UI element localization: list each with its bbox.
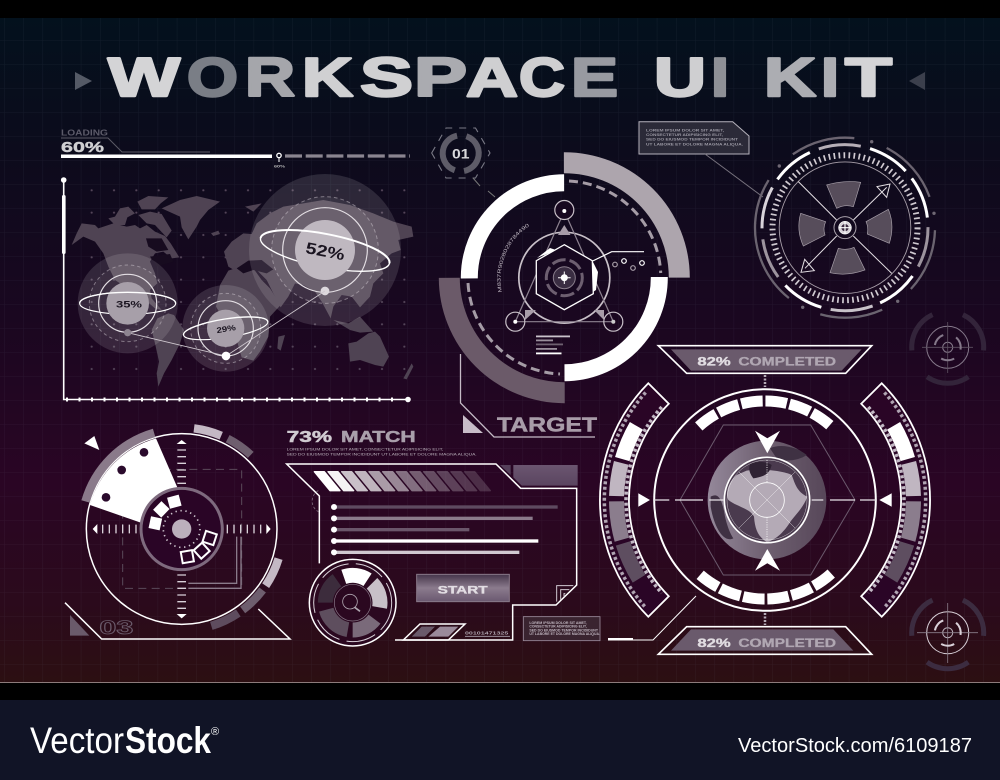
title: I	[711, 46, 729, 108]
chart axes	[61, 177, 411, 402]
code readout	[465, 630, 510, 636]
banner: bottom completed	[658, 627, 872, 654]
title: W	[108, 46, 180, 108]
striped progress bar	[314, 472, 490, 491]
crosshair line	[653, 499, 877, 501]
world map with percentage planets	[72, 174, 413, 387]
globe dial	[560, 295, 970, 705]
footer logo: Vector	[30, 720, 124, 761]
icon: reticle lower	[898, 583, 998, 683]
START button: START	[438, 584, 488, 596]
centre crosshair	[546, 260, 582, 296]
icon: right title arrow	[909, 72, 925, 90]
START button	[417, 574, 509, 602]
planet: 52%	[249, 174, 401, 326]
block arcs	[625, 360, 905, 640]
banner: bottom completed: COMPLETED	[738, 636, 836, 650]
match panel	[287, 429, 600, 646]
banner: top completed: COMPLETED	[738, 354, 836, 368]
footer logo: Stock	[125, 720, 211, 761]
text callout top right	[639, 122, 763, 197]
icon: faint reticle upper	[898, 297, 998, 397]
white sector	[90, 438, 177, 523]
pointer and small circles	[593, 252, 644, 270]
outer arcs	[40, 387, 324, 671]
dark seas over land	[146, 238, 273, 273]
right gauge	[560, 295, 970, 705]
73% match heading	[287, 429, 477, 457]
search dial	[309, 559, 396, 646]
bottom text box: CONSECTETUR ADIPISICING ELIT,	[529, 625, 587, 629]
73% match heading: LOREM IPSUM DOLOR SIT AMET, CONSECTETUR ADIPISICING ELIT,	[287, 448, 444, 452]
banner: top completed: 82%	[697, 354, 731, 368]
loading bar: LOADING	[61, 128, 108, 138]
base frame	[65, 603, 290, 639]
title: R	[245, 46, 295, 108]
hexagon	[680, 425, 855, 575]
curved code text: M837R90280287844902	[497, 224, 529, 292]
corner bracket	[557, 586, 573, 602]
arrowheads	[638, 431, 892, 571]
wedges, arrows and hub	[798, 182, 892, 274]
text callout top right: LOREM IPSUM DOLOR SIT AMET,	[646, 128, 724, 132]
banner: top completed	[658, 346, 872, 373]
text callout top right: UT LABORE ET DOLORE MAGNA ALIQUA.	[646, 142, 743, 146]
left gauge	[560, 295, 970, 705]
target dial	[438, 152, 690, 404]
loading bar: 60%	[61, 139, 104, 156]
bottom text box: UT LABORE ET DOLORE MAGNA ALIQUA.	[529, 632, 600, 636]
planet: 35%: 35%	[116, 300, 142, 310]
filled blocks	[149, 495, 182, 530]
text callout top right: CONSECTETUR ADIPISICING ELIT,	[646, 133, 723, 137]
title: A	[466, 46, 518, 108]
banner: bottom completed: 82%	[697, 636, 731, 650]
title: I	[821, 46, 839, 108]
code readout: 00101471325	[465, 630, 509, 635]
planet: 29%: 29%	[216, 323, 236, 335]
footer logo: ®	[211, 726, 219, 738]
icon: left title arrow	[75, 72, 92, 90]
planet: 52%: 52%	[304, 240, 346, 264]
white ring arcs	[469, 183, 659, 373]
loading bar: 60%	[274, 164, 286, 168]
title: U	[654, 46, 706, 108]
footer link: VectorStock.com/6109187	[738, 735, 972, 757]
small text lines	[536, 336, 570, 354]
radar gauge bottom left	[40, 387, 324, 671]
title: O	[187, 46, 238, 108]
connector to globe dial	[608, 596, 696, 640]
73% match heading: MATCH	[341, 429, 416, 446]
title: K	[302, 46, 353, 108]
icon: magnifier	[343, 594, 360, 611]
text callout top right: SED DO EIUSMOD TEMPOR INCIDIDUNT	[646, 138, 739, 142]
73% match heading: SED DO EIUSMOD TEMPOR INCIDIDUNT UT LABORE ET DOLORE MAGNA ALIQUA.	[287, 453, 477, 457]
73% match heading: 73%	[287, 429, 333, 446]
dashed side arc	[312, 491, 318, 512]
inner ring	[779, 162, 911, 294]
dotted ticks	[764, 375, 766, 625]
white triangle	[84, 436, 99, 450]
planet: 35%	[78, 253, 178, 353]
triangle and hexagon target	[506, 200, 623, 331]
footer logo	[30, 720, 219, 761]
grey outer arcs	[449, 163, 679, 393]
crosshair scales	[103, 450, 261, 608]
outer ring	[654, 389, 876, 611]
panel frame	[287, 464, 577, 640]
curved code text	[497, 224, 529, 292]
title: C	[519, 46, 565, 108]
map land masses	[72, 196, 413, 387]
badge 01	[432, 128, 495, 197]
badge 01: 01	[452, 146, 470, 162]
title: K	[764, 46, 816, 108]
TARGET label	[460, 354, 598, 437]
hub	[141, 488, 222, 570]
title: S	[360, 46, 413, 108]
title	[108, 46, 892, 108]
panel header block	[500, 465, 578, 486]
title: T	[845, 46, 892, 108]
loading bar	[61, 128, 410, 168]
dashed arcs	[569, 181, 661, 273]
outer ring	[86, 434, 277, 624]
TARGET label: TARGET	[497, 414, 598, 436]
sector markers	[102, 448, 148, 502]
list bars	[331, 504, 558, 555]
footer	[0, 700, 1000, 780]
outlined blocks	[181, 531, 217, 563]
outer grey arcs	[718, 101, 972, 354]
radar dial top right	[718, 101, 972, 354]
bottom text box: SED DO EIUSMOD TEMPOR INCIDIDUNT	[529, 628, 598, 632]
tick ring	[772, 155, 918, 300]
parallelogram indicators	[403, 624, 465, 640]
bottom text box: LOREM IPSUM DOLOR SIT AMET,	[529, 621, 587, 625]
planet: 29%	[182, 285, 269, 372]
connector lines	[124, 291, 325, 360]
title: P	[414, 46, 467, 108]
segment arcs	[729, 112, 961, 344]
radar gauge bottom left: 03	[99, 618, 134, 639]
small dots	[778, 140, 936, 309]
earth globe	[708, 441, 826, 559]
bottom text box	[523, 617, 600, 641]
title: E	[571, 46, 618, 108]
dashed square and brackets	[123, 469, 242, 588]
